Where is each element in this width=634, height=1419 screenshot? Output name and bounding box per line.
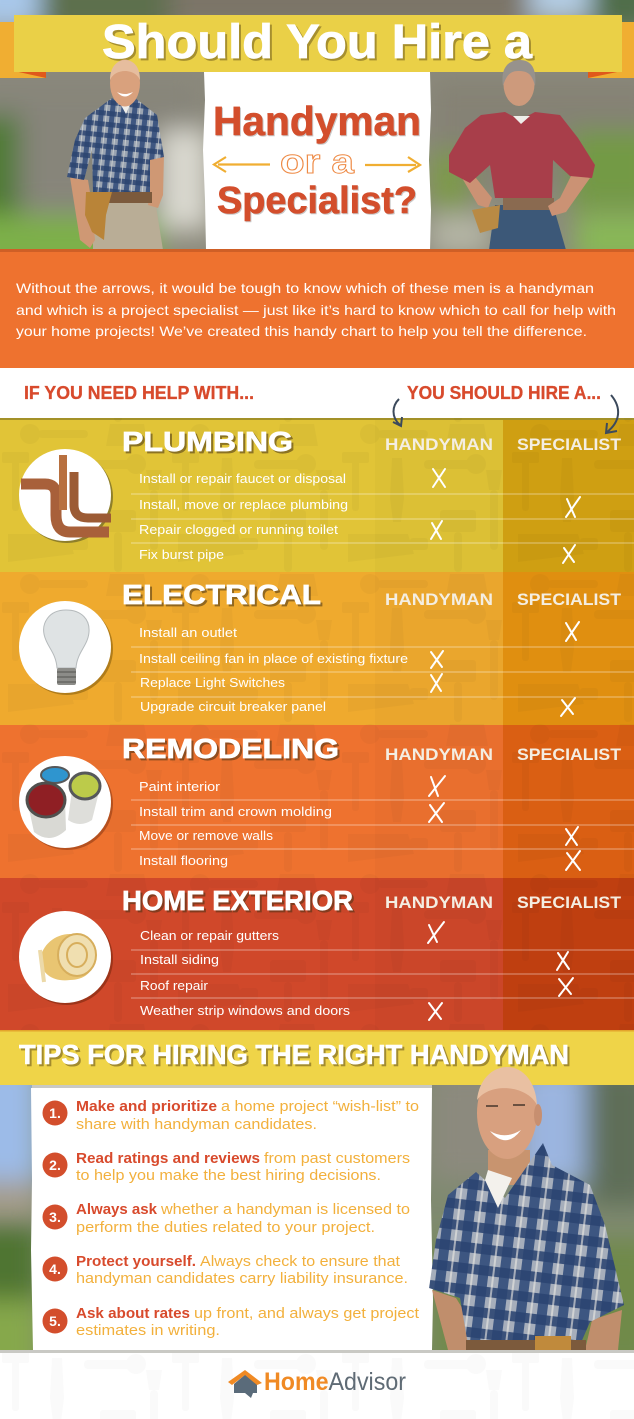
tip 3: 3.: [49, 1209, 61, 1225]
row text: [139, 780, 332, 868]
column labels: HANDYMAN: [385, 590, 493, 609]
row text: Move or remove walls: [139, 829, 273, 843]
column labels: [385, 435, 622, 454]
right column heading: YOU SHOULD HIRE A...: [407, 383, 601, 403]
intro text: Without the arrows, it would be tough to know which of these men is a handyman: [16, 281, 594, 296]
heading: ELECTRICAL: [122, 579, 321, 610]
row lines: [131, 800, 634, 849]
tip 2: Read ratings and reviews: [76, 1151, 260, 1167]
row text: Repair clogged or running toilet: [139, 523, 339, 537]
column labels: SPECIALIST: [517, 435, 622, 454]
heading: PLUMBING: [122, 426, 293, 457]
tip 5: up front, and always get project: [194, 1306, 419, 1322]
x marks: [429, 776, 580, 870]
title: Should You Hire a: [102, 16, 532, 69]
row text: Fix burst pipe: [139, 548, 224, 562]
tip 2: [42, 1151, 410, 1184]
heading: HOME EXTERIOR: [122, 885, 353, 916]
logo wordmark: HomeAdvisor: [264, 1368, 406, 1396]
heading: Specialist: Specialist?: [217, 180, 417, 222]
intro panel: [0, 249, 634, 368]
intro text: your home projects! We’ve created this handy chart to help you tell the difference.: [16, 324, 587, 339]
x marks: [431, 622, 579, 716]
row text: [140, 929, 350, 1018]
tips heading: TIPS FOR HIRING THE RIGHT HANDYMAN: [19, 1039, 569, 1070]
arrow to handyman column: [393, 399, 402, 426]
large handyman figure: [429, 1067, 624, 1350]
tip 1: [42, 1099, 419, 1133]
row lines: [131, 494, 634, 543]
tip 1: share with handyman candidates.: [76, 1117, 317, 1133]
row text: [139, 626, 408, 714]
row text: Install or repair faucet or disposal: [139, 472, 346, 486]
tip 5: Ask about rates: [76, 1306, 190, 1322]
tip 5: estimates in writing.: [76, 1323, 220, 1339]
tip 3: [42, 1202, 410, 1236]
HomeAdvisor logo: [228, 1368, 406, 1398]
row text: Install siding: [140, 953, 219, 967]
heading: or a: or a: [280, 143, 355, 181]
hero white panel: [203, 72, 431, 250]
tip 3: whether a handyman is licensed to: [160, 1202, 410, 1218]
x marks: [428, 922, 573, 1020]
row text: Clean or repair gutters: [140, 929, 279, 943]
row lines: [131, 647, 634, 697]
tip 4: handyman candidates carry liability insurance.: [76, 1271, 408, 1287]
tip 2: from past customers: [264, 1151, 410, 1167]
arrow pointing right: [365, 157, 420, 172]
row text: Install, move or replace plumbing: [139, 498, 348, 512]
row text: Install flooring: [139, 854, 228, 868]
icon: weather strip roll: [19, 911, 113, 1005]
intro text: and which is a project specialist — just like it’s hard to know which to call for help with: [16, 303, 616, 318]
tips white panel: [31, 1085, 433, 1350]
arrow pointing left: [214, 157, 270, 172]
column labels: HANDYMAN: [385, 893, 493, 912]
panel: electrical: [0, 572, 634, 725]
tips banner: [0, 1030, 634, 1085]
row lines: [131, 950, 634, 998]
logo roof: [228, 1370, 262, 1385]
handyman figure: [67, 60, 164, 250]
row text: Install ceiling fan in place of existing fixture: [139, 652, 408, 666]
title banner: [14, 15, 622, 72]
heading: Handyman: Handyman: [213, 98, 421, 144]
column labels: [385, 590, 622, 609]
panel: remodeling: [0, 725, 634, 878]
logo house icon: [234, 1374, 257, 1398]
heading: REMODELING: [122, 733, 339, 764]
specialist figure: [449, 60, 595, 250]
left column heading: IF YOU NEED HELP WITH...: [24, 383, 254, 403]
panel: home exterior: [0, 878, 634, 1030]
tip 1: 1.: [49, 1105, 61, 1121]
hero background photo: blurred house and lawn: [0, 0, 634, 275]
column labels: SPECIALIST: [517, 590, 622, 609]
row text: Install an outlet: [139, 626, 238, 640]
column labels: SPECIALIST: [517, 745, 622, 764]
tip 4: 4.: [49, 1261, 61, 1277]
tip 1: a home project “wish-list” to: [221, 1099, 419, 1115]
left ribbon tail: [0, 22, 46, 78]
tip 5: [42, 1306, 419, 1339]
column labels: [385, 893, 622, 912]
arrow to specialist column: [606, 395, 618, 433]
row text: Upgrade circuit breaker panel: [140, 700, 326, 714]
row text: Roof repair: [140, 979, 208, 993]
tip 4: Protect yourself.: [76, 1254, 196, 1270]
x marks: [431, 469, 580, 563]
tip 3: perform the duties related to your project.: [76, 1220, 375, 1236]
column labels: [385, 745, 622, 764]
tip 5: 5.: [49, 1313, 61, 1329]
icon: copper pipes: [19, 449, 113, 543]
tips background photo: [0, 1085, 634, 1350]
row text: Replace Light Switches: [140, 676, 285, 690]
row text: [139, 472, 348, 562]
column labels: HANDYMAN: [385, 435, 493, 454]
column labels: SPECIALIST: [517, 893, 622, 912]
row text: Weather strip windows and doors: [140, 1004, 350, 1018]
row text: Paint interior: [139, 780, 220, 794]
column labels: HANDYMAN: [385, 745, 493, 764]
right ribbon tail: [588, 22, 634, 78]
panel: plumbing: [0, 418, 634, 572]
tip 4: Always check to ensure that: [200, 1254, 400, 1270]
icon: paint cans: [19, 756, 113, 850]
tip 2: 2.: [49, 1157, 61, 1173]
chart header: [0, 368, 634, 418]
tip 3: Always ask: [76, 1202, 158, 1218]
footer: [0, 1350, 634, 1419]
intro text: [16, 281, 616, 339]
tip 1: Make and prioritize: [76, 1099, 217, 1115]
tip 2: to help you make the best hiring decisions.: [76, 1168, 381, 1184]
row text: Install trim and crown molding: [139, 805, 332, 819]
icon: light bulb: [19, 601, 113, 695]
tip 4: [42, 1254, 408, 1287]
